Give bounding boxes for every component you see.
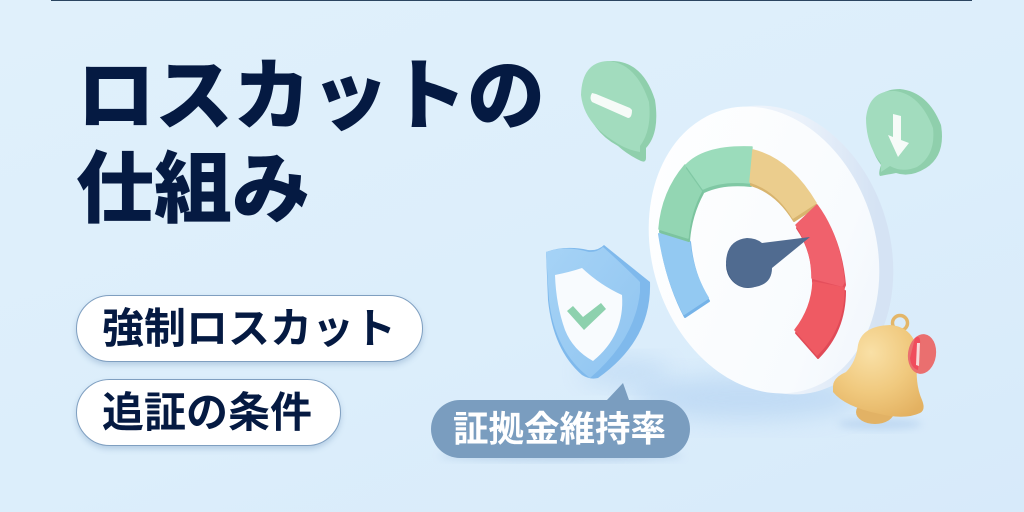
gauge segment: red lower <box>795 282 845 358</box>
pill: margin call conditions: 追証の条件 <box>102 389 312 436</box>
icon: green minus speech bubble <box>581 61 656 162</box>
needle <box>726 237 810 288</box>
badge <box>905 332 939 376</box>
title: ロスカットの <box>77 52 545 140</box>
icon: shield with check <box>546 245 650 379</box>
pill: margin call conditions <box>76 379 341 446</box>
shadows <box>580 359 922 430</box>
callout: margin maintenance rate: 証拠金維持率 <box>453 409 666 449</box>
icon: gold bell <box>833 316 939 424</box>
gauge disc <box>614 76 928 424</box>
gauge segment: red upper <box>796 205 845 290</box>
icon: green down-arrow speech bubble <box>866 89 942 176</box>
gauge segment: green right <box>686 147 753 192</box>
pill: forced loss cut <box>76 295 423 362</box>
pill: forced loss cut: 強制ロスカット <box>102 305 396 352</box>
gauge segment: blue <box>659 234 709 317</box>
gauge segment: yellow <box>750 150 817 221</box>
callout: margin maintenance rate <box>431 383 690 464</box>
gauge segment: green left <box>659 165 703 241</box>
title <box>76 52 545 233</box>
title: 仕組み <box>76 145 310 233</box>
